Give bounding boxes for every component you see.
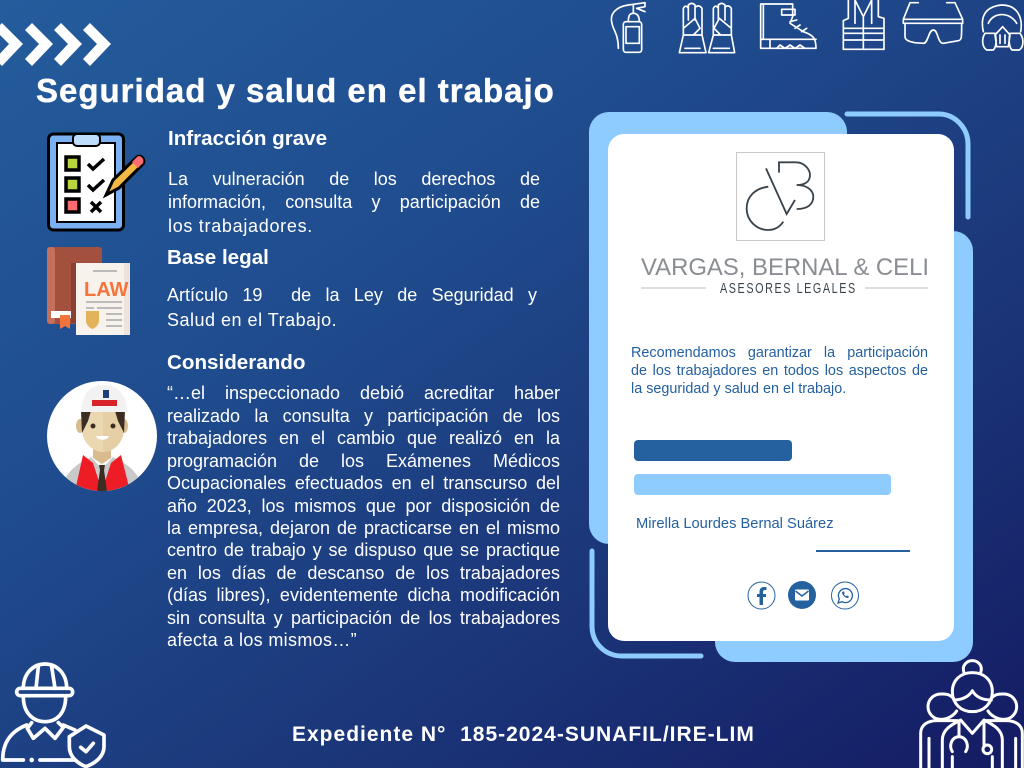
text block: recommendation: Recomendamos garantizar la participación xyxy=(631,345,928,361)
logo: Vargas, Bernal & Celi: VARGAS, BERNAL & CELI xyxy=(641,254,929,281)
text block: considerando quote: (días libres), evidentemente dicha modificación xyxy=(167,585,560,605)
footer: case number: Expediente N° 185-2024-SUNAFIL/IRE-LIM xyxy=(292,723,755,746)
icon: safety boot xyxy=(761,4,816,48)
icon: worker with shield xyxy=(0,662,106,768)
title: Seguridad y salud en el trabajo xyxy=(36,72,555,109)
top row: safety equipment icons xyxy=(610,0,1024,54)
text block: considerando quote: “…el inspeccionado debió acreditar haber xyxy=(167,383,560,403)
panel: light blue back frames xyxy=(589,112,973,662)
text block: infracción: información, consulta y participación de xyxy=(168,192,540,212)
text block: considerando quote: año 2023, los mismos que por disposición de xyxy=(167,496,560,516)
panel: white card xyxy=(608,134,954,641)
text block: infracción xyxy=(168,169,540,236)
logo: Vargas, Bernal & Celi: ASESORES LEGALES xyxy=(720,279,857,296)
icon: medical team xyxy=(919,659,1024,768)
light blue bar xyxy=(634,474,891,495)
icon: safety glasses xyxy=(903,3,963,43)
text block: base legal: Salud en el Trabajo. xyxy=(167,310,337,330)
icon: safety vest xyxy=(843,0,884,49)
text block: considerando quote: realizado la consulta y participación de los xyxy=(167,406,560,426)
icon: gas mask xyxy=(982,5,1023,50)
dark blue bar xyxy=(634,440,792,461)
underline accent xyxy=(816,550,910,552)
heading: base legal: Base legal xyxy=(167,246,269,269)
icon: fire extinguisher xyxy=(611,3,645,52)
text block: base legal xyxy=(167,285,537,330)
text block: infracción: los trabajadores. xyxy=(168,216,313,236)
logo: Vargas, Bernal & Celi xyxy=(641,152,929,296)
text block: considerando quote: la empresa, dejaron de practicarse en el mismo xyxy=(167,518,560,538)
text block: considerando quote xyxy=(167,383,560,650)
icon: law book and document xyxy=(47,247,130,335)
text block: infracción: La vulneración de los derechos de xyxy=(168,169,540,189)
icon: clipboard checklist xyxy=(47,132,146,232)
icon: gloves xyxy=(679,3,735,53)
text block: recommendation: de los trabajadores en todos los aspectos de xyxy=(631,363,928,379)
icon: facebook xyxy=(748,582,776,610)
text block: considerando quote: en los días de descanso de los trabajadores xyxy=(167,563,560,583)
icon: chevrons arrow row xyxy=(0,23,111,66)
text block: considerando quote: sin consulta y participación de los trabajadores xyxy=(167,608,560,628)
author name: Mirella Lourdes Bernal Suárez xyxy=(636,516,834,532)
text block: considerando quote: programación de los Exámenes Médicos xyxy=(167,451,560,471)
text block: recommendation: la seguridad y salud en el trabajo. xyxy=(631,381,846,397)
icon: email xyxy=(788,581,816,609)
icon: whatsapp xyxy=(831,582,859,610)
icon: law book and document: LAW xyxy=(84,279,129,301)
text block: considerando quote: Ocupacionales efectuados en el transcurso del xyxy=(167,473,560,493)
heading: infracción grave: Infracción grave xyxy=(168,127,327,150)
text block: considerando quote: trabajadores en el cambio que realizó en la xyxy=(167,428,560,448)
icon: inspector avatar xyxy=(47,381,157,491)
text block: considerando quote: afecta a los mismos…” xyxy=(167,630,357,650)
text block: recommendation xyxy=(631,345,928,397)
heading: considerando: Considerando xyxy=(167,351,305,374)
text block: base legal: Artículo 19 de la Ley de Seguridad y xyxy=(167,285,537,305)
text block: considerando quote: centro de trabajo y se dispuso que se practique xyxy=(167,540,560,560)
